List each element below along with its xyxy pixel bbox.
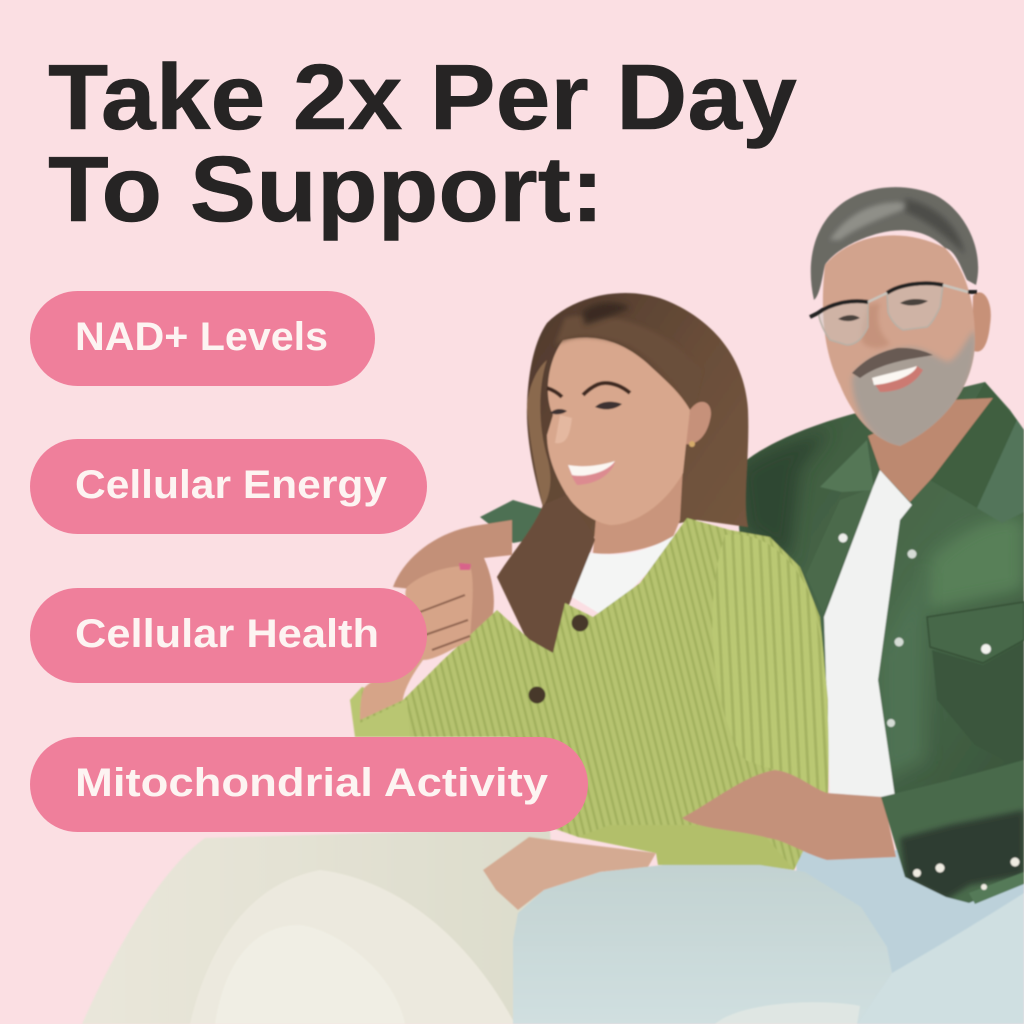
woman: hair back [497, 293, 748, 653]
title [48, 45, 797, 241]
man: nose shadow [861, 303, 890, 348]
man: face [823, 235, 975, 446]
man: neck [868, 398, 993, 502]
woman: hair top highlights [555, 316, 700, 405]
woman: neck [593, 465, 683, 554]
man: near thigh [513, 865, 892, 1024]
woman: cardigan [350, 518, 829, 870]
title: To Support: [48, 137, 604, 241]
pill: Mitochondrial Activity [30, 737, 588, 832]
man: light jeans [796, 850, 1024, 1024]
pill: Cellular Energy: Cellular Energy [75, 463, 388, 507]
woman: lower hand [483, 837, 656, 910]
woman: hair front strand [527, 360, 550, 507]
man: green shirt [735, 382, 1024, 800]
man: white t-shirt [824, 470, 912, 797]
man: glasses [810, 283, 977, 345]
pill: NAD+ Levels [30, 291, 375, 386]
woman: fingers holding his hand [360, 563, 473, 720]
man: beard [852, 330, 976, 450]
blanket over her legs [82, 828, 560, 1024]
title: Take 2x Per Day [48, 45, 797, 149]
woman: dark hair part [582, 302, 630, 325]
man: shirt cuff [881, 760, 1024, 904]
woman: white top [572, 535, 675, 617]
man: ear [972, 292, 991, 352]
pill: NAD+ Levels: NAD+ Levels [75, 315, 328, 359]
blanket end by knee [715, 1002, 860, 1024]
photo: couple sitting together [82, 187, 1024, 1024]
man: far leg [857, 893, 1024, 1024]
man: hair [811, 187, 978, 300]
woman: buttons [528, 614, 588, 704]
man: hand on her sleeve [682, 770, 896, 860]
man: arm behind her shoulders [393, 500, 547, 642]
pill: Cellular Health: Cellular Health [75, 612, 379, 656]
pill: Mitochondrial Activity: Mitochondrial Activity [75, 761, 549, 805]
woman: ear [685, 402, 711, 444]
pill: Cellular Health [30, 588, 427, 683]
woman: lower hair lock [497, 495, 595, 653]
pill: Cellular Energy [30, 439, 427, 534]
woman: face [547, 337, 690, 525]
woman: earring [689, 441, 695, 447]
